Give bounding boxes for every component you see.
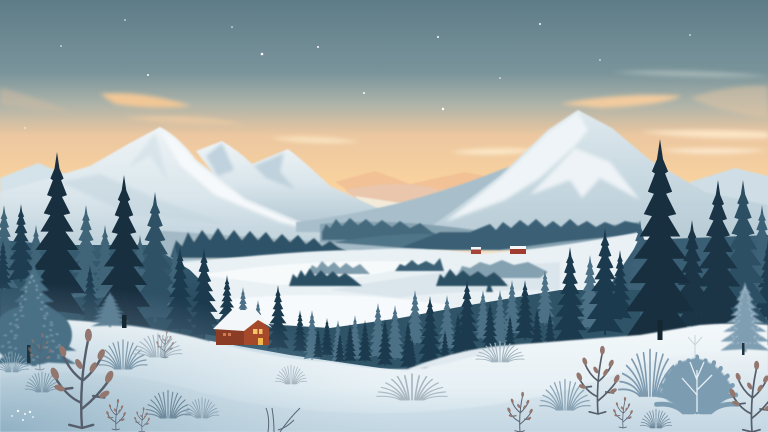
foreground snow — [0, 282, 768, 432]
mountains: left range — [0, 127, 430, 268]
central forest row — [166, 228, 640, 372]
frosted trees — [0, 264, 768, 366]
back forest: left — [0, 192, 210, 345]
frosted round bush — [656, 335, 738, 412]
stars — [24, 19, 691, 129]
small red cabins — [471, 246, 526, 254]
sky — [0, 0, 768, 260]
snow fields — [170, 230, 660, 345]
clouds — [0, 71, 768, 155]
distant tree clusters — [289, 258, 548, 292]
mountain: right peak — [296, 110, 768, 260]
winter twigs with buds — [28, 329, 768, 432]
distant orange mountains — [335, 171, 505, 212]
dark foreground pines — [29, 139, 743, 342]
snow dots bottom left — [11, 410, 34, 421]
far left and far right peaks — [0, 163, 768, 240]
back forest: right — [600, 180, 768, 345]
trunk of dark pines — [122, 315, 662, 340]
mid distance forest bands — [150, 218, 640, 262]
dry grass bushes — [0, 334, 681, 428]
cabin — [213, 310, 272, 345]
